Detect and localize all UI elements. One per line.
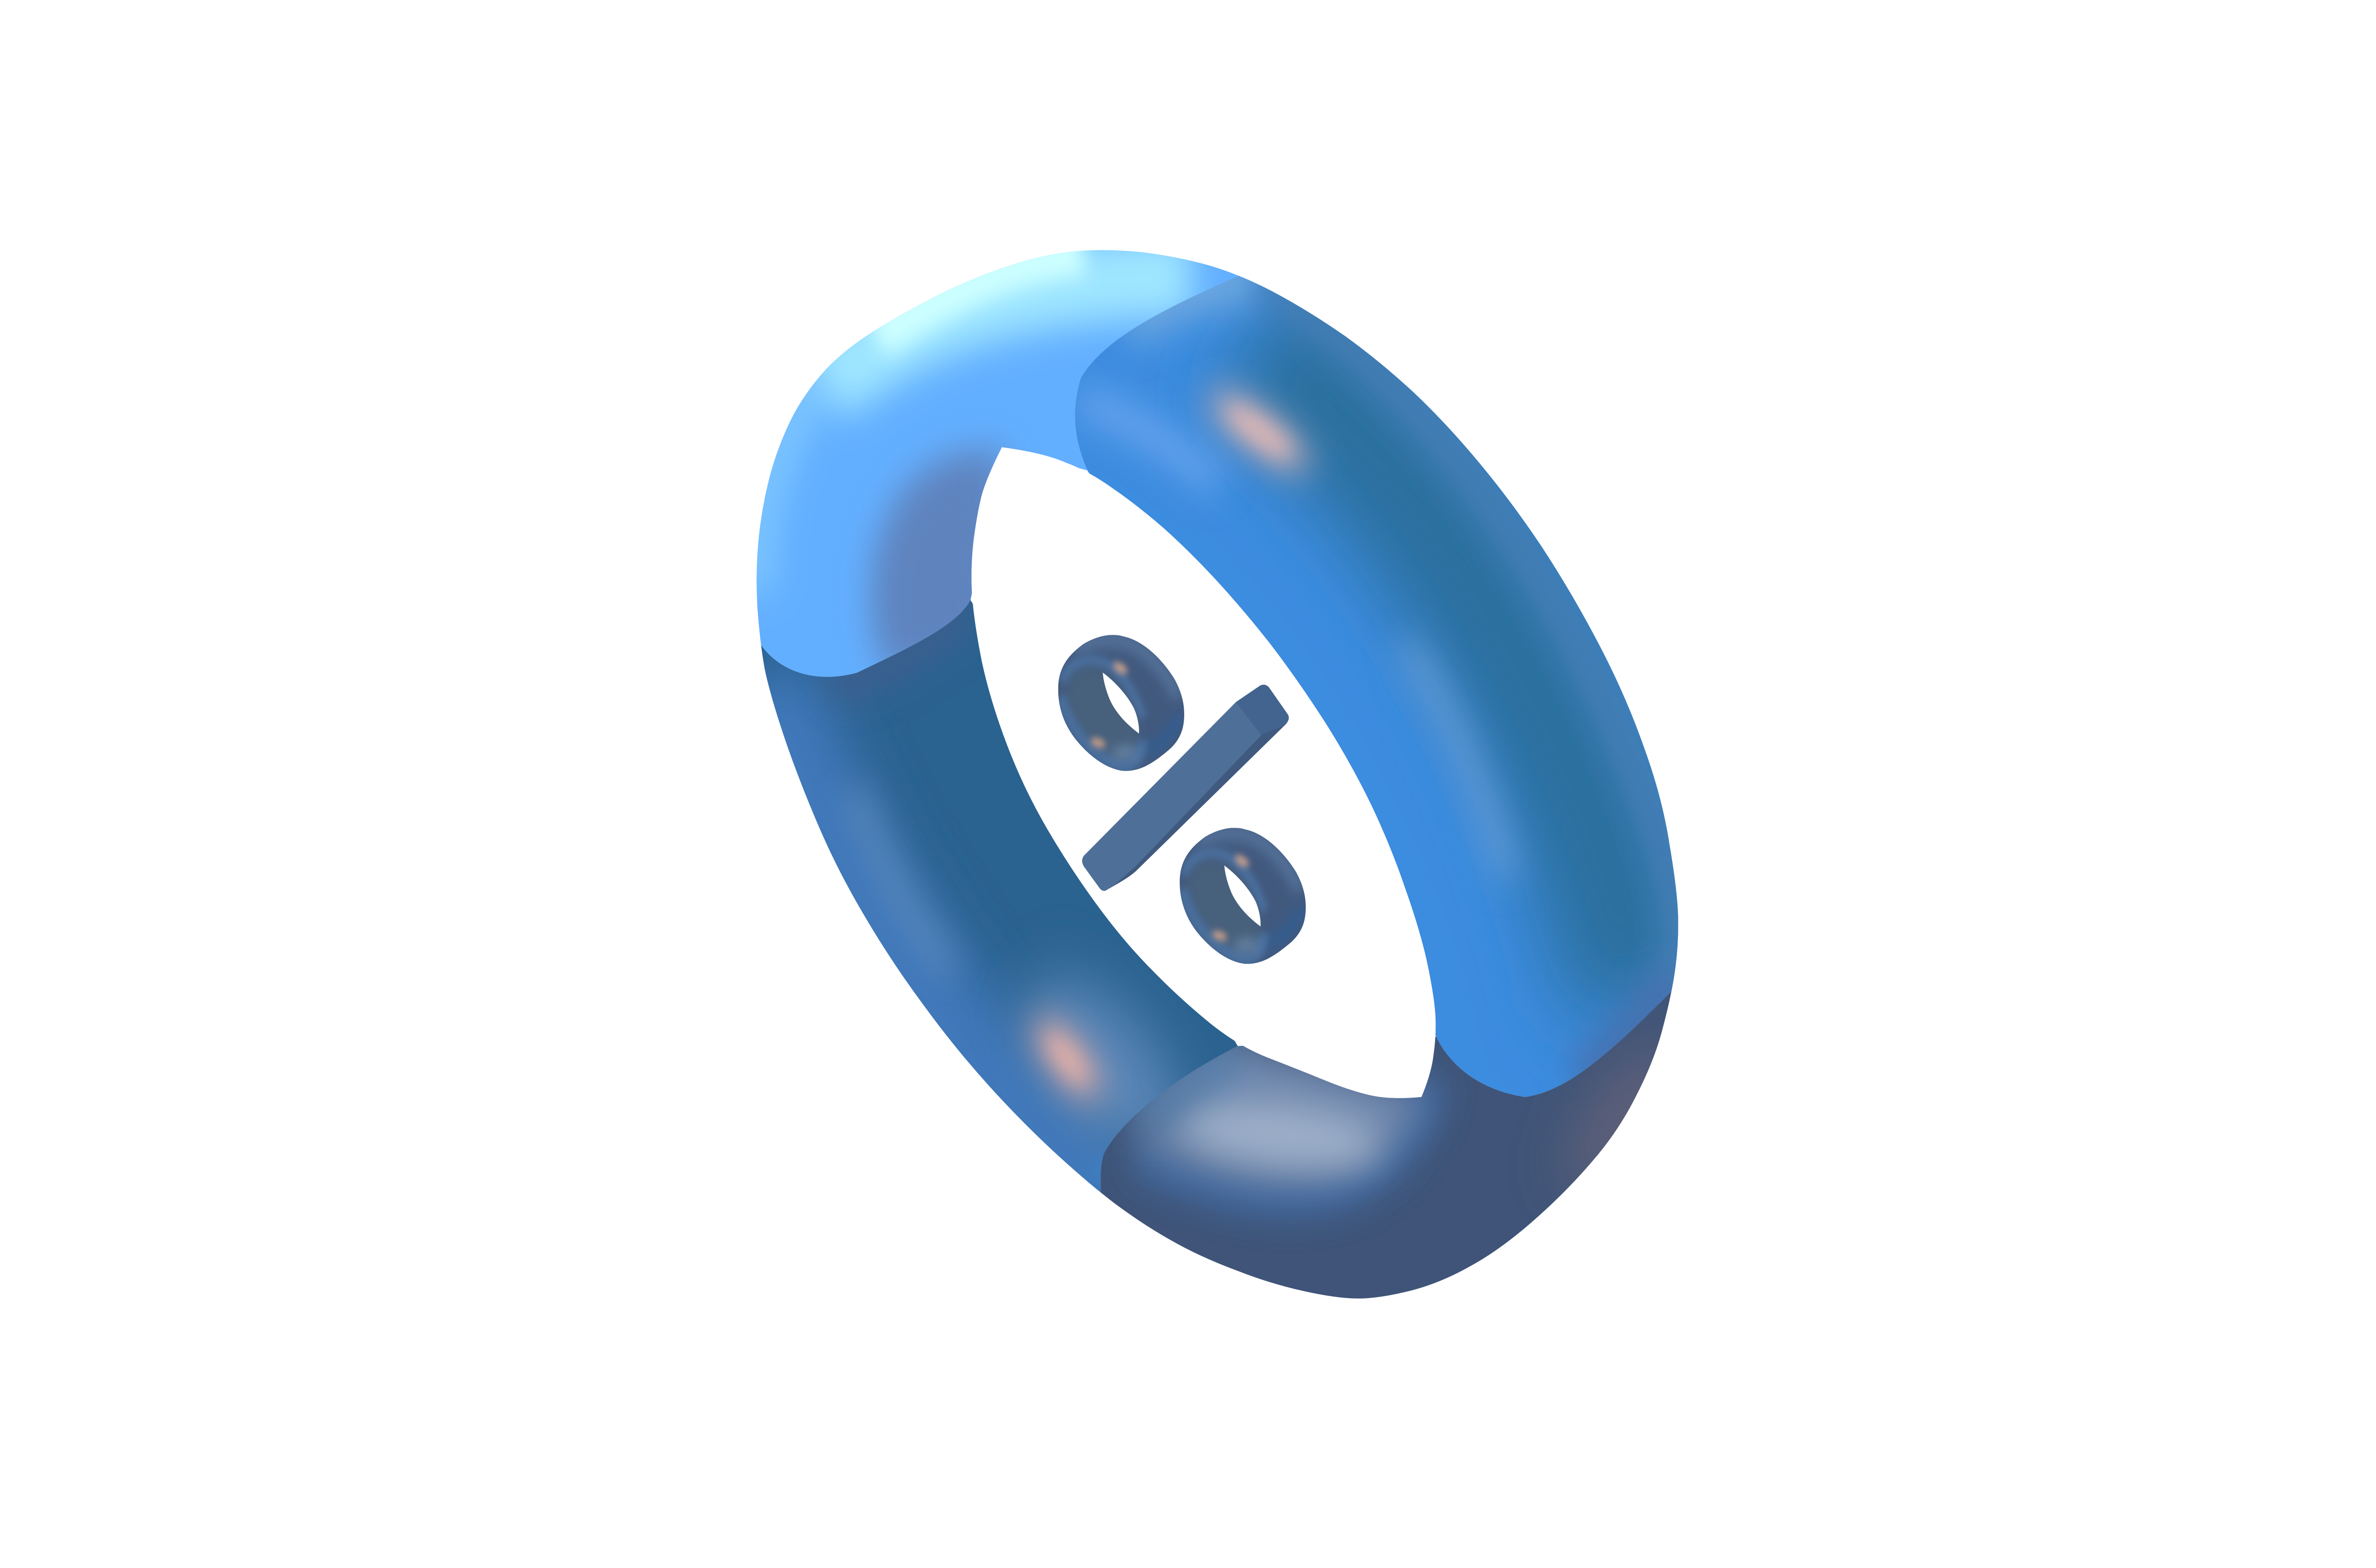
ring segment: light top-left (757, 250, 1238, 677)
ring segment: darkest bottom-right (1101, 991, 1672, 1299)
percent: diagonal bar (1082, 685, 1289, 891)
percent: lower ring (1169, 818, 1317, 977)
percent sign (1047, 625, 1317, 977)
ring segment: blue right (1075, 276, 1678, 1097)
percent: upper ring (1047, 625, 1196, 784)
3D ring illustration (757, 250, 1678, 1299)
ring segment: dark blue lower-left (761, 600, 1238, 1193)
